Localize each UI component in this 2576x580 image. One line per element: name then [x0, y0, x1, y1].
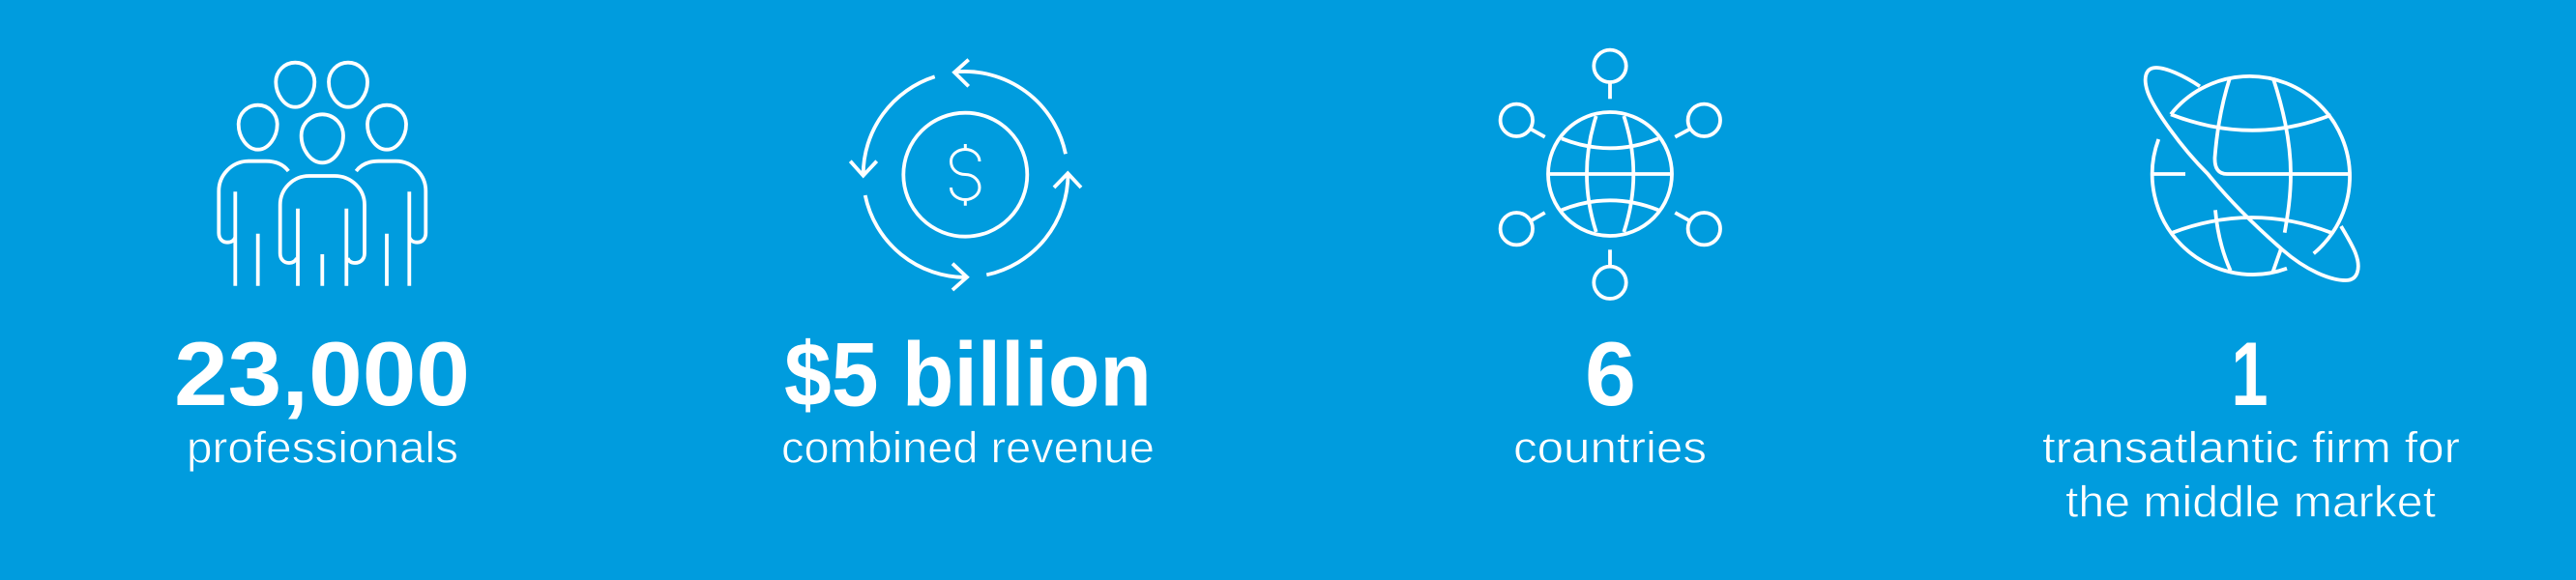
icon: globe with connected nodes — [1501, 50, 1720, 299]
panel: combined revenue — [781, 60, 1155, 472]
label: transatlantic firm for the middle market — [2042, 422, 2460, 526]
panel: countries — [1501, 50, 1720, 472]
icon: dollar coin with circular arrows — [850, 60, 1081, 290]
label: professionals: professionals — [187, 422, 458, 472]
figure: 1: 1 — [2232, 323, 2269, 424]
figure: 6: 6 — [1585, 323, 1636, 424]
label: transatlantic firm for the middle market: the middle market — [2065, 477, 2437, 526]
panel: transatlantic firm — [2042, 68, 2460, 526]
panel: professionals — [174, 63, 470, 472]
icon: group of people — [219, 63, 425, 286]
label: transatlantic firm for the middle market: transatlantic firm for — [2042, 422, 2460, 472]
figure: $5 billion: $5 billion — [784, 323, 1152, 424]
figure: 23,000: 23,000 — [174, 323, 470, 424]
label: countries: countries — [1513, 422, 1707, 472]
label: combined revenue: combined revenue — [781, 422, 1155, 472]
icon: globe with orbit ring — [2146, 68, 2358, 280]
